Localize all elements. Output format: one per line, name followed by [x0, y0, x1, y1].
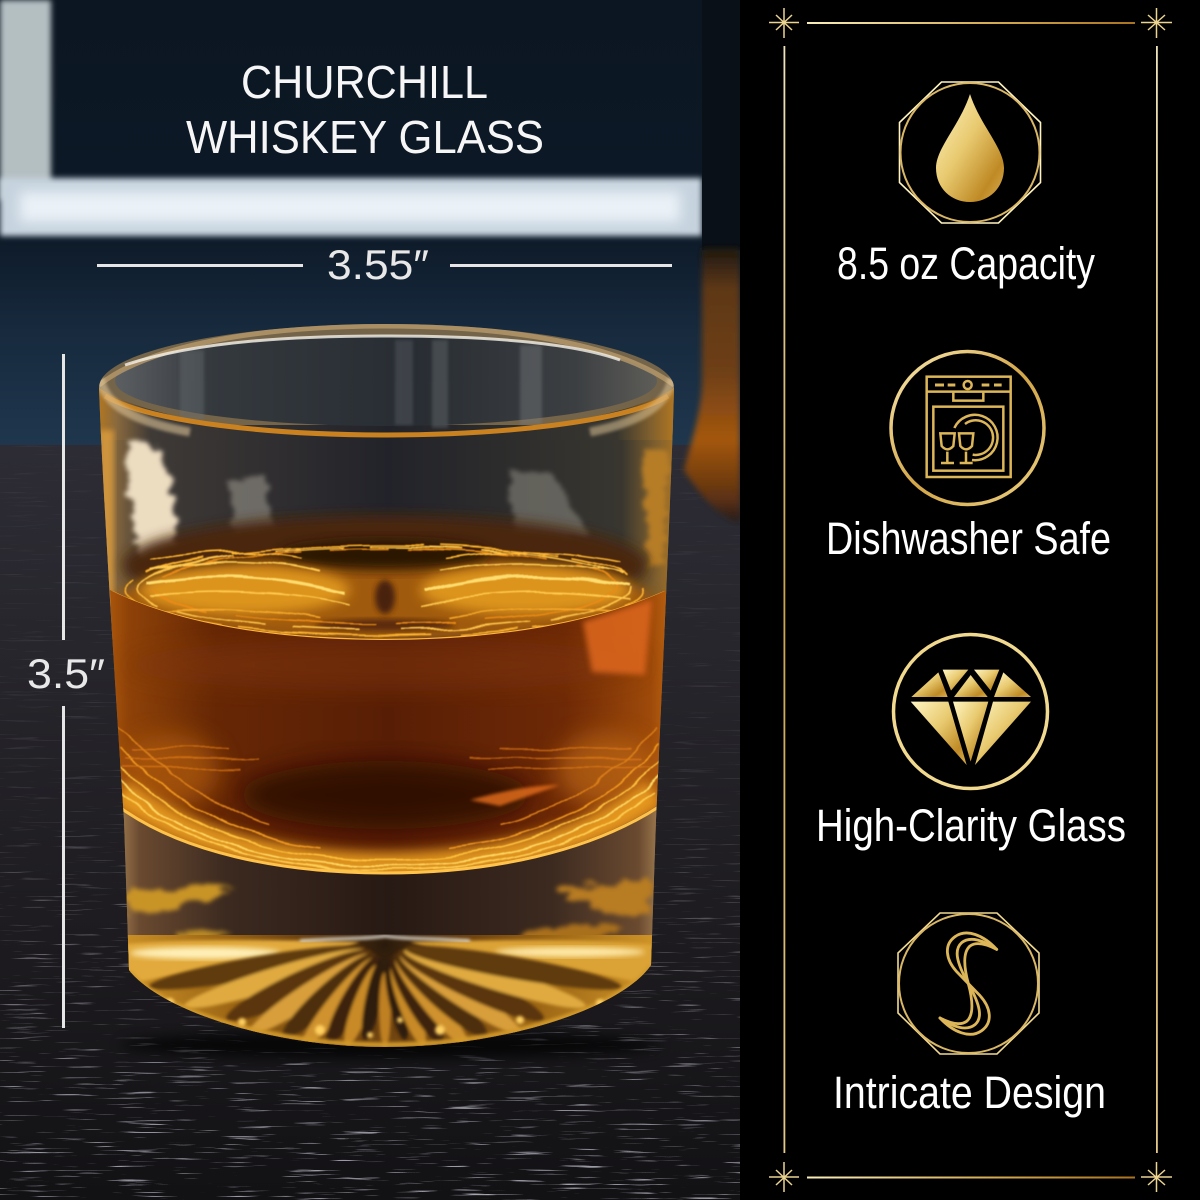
title: CHURCHILL [241, 56, 488, 108]
decorative gold frame [769, 8, 1172, 1192]
feature: design [833, 913, 1106, 1118]
label: Intricate Design [833, 1067, 1106, 1118]
glass shadow on table [120, 1031, 660, 1059]
title: WHISKEY GLASS [186, 111, 544, 163]
radial flutes [148, 944, 622, 1047]
icon: swirl S [898, 913, 1039, 1054]
height dimension 3.5 inches: 3.5″ [27, 650, 105, 697]
feature: capacity [837, 82, 1095, 289]
label: High-Clarity Glass [816, 800, 1126, 851]
icon: water drop [900, 82, 1040, 223]
label: Dishwasher Safe [826, 513, 1111, 564]
feature: dishwasher safe [826, 352, 1111, 564]
second whiskey glass blurred in background [684, 248, 740, 522]
bright reflections in upper wall [129, 440, 668, 570]
feature: clarity [816, 634, 1126, 851]
whiskey surface seen through glass [117, 515, 653, 642]
sunburst base [128, 934, 652, 1047]
clear lower glass [118, 806, 660, 950]
wooden table surface [0, 445, 740, 1200]
width dimension 3.55 inches: 3.55″ [327, 241, 429, 288]
icon: diamond [894, 634, 1048, 788]
label: 8.5 oz Capacity [837, 238, 1095, 289]
width dimension 3.55 inches [97, 241, 672, 288]
panel: features [740, 0, 1200, 1200]
photo background: blurred room behind the glass [0, 0, 740, 460]
title [186, 56, 544, 163]
upper glass wall [95, 425, 680, 640]
icon: dishwasher [891, 352, 1044, 504]
whiskey body [100, 585, 680, 875]
rim interior [115, 336, 657, 428]
rim highlight [99, 326, 674, 435]
height dimension 3.5 inches [27, 354, 105, 1028]
whiskey glass [90, 320, 690, 1060]
